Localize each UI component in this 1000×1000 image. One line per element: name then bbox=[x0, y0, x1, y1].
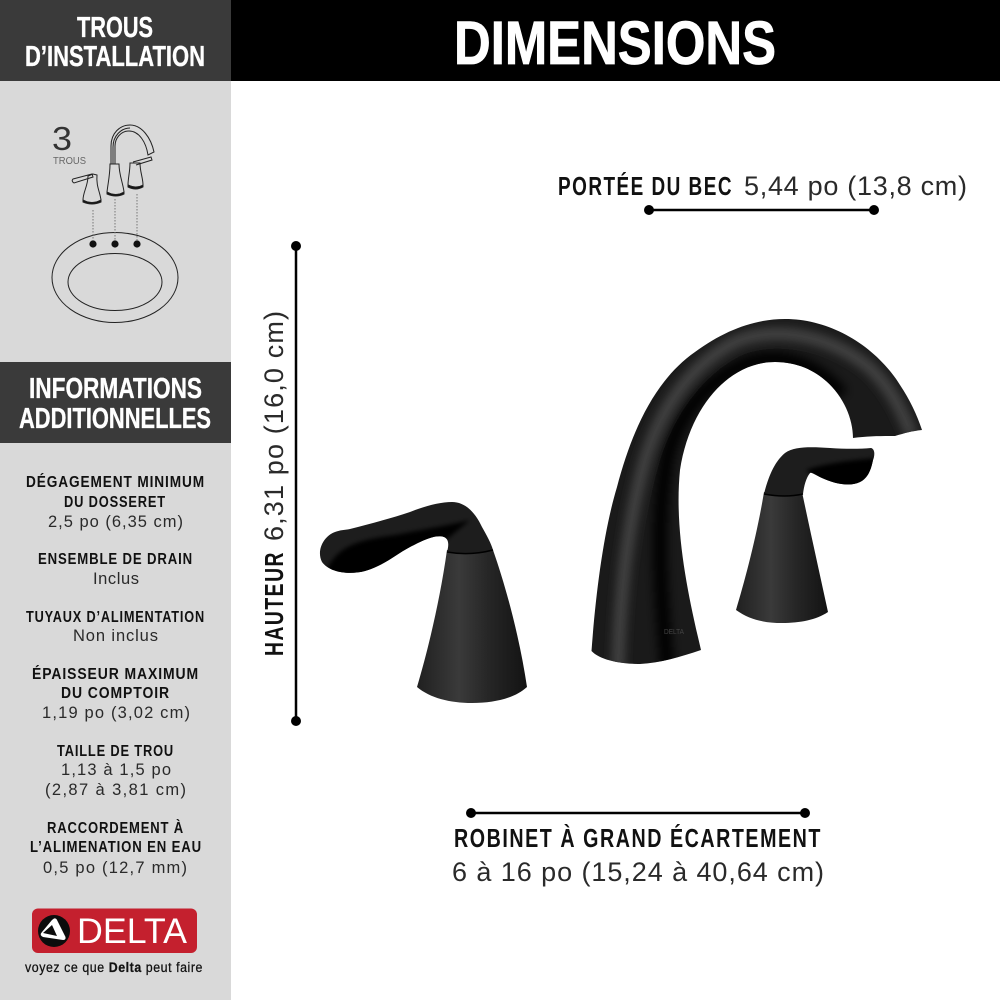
spec: hole size: TAILLE DE TROU bbox=[57, 743, 174, 760]
spec: backsplash clearance: DÉGAGEMENT MINIMUM bbox=[26, 474, 205, 491]
logo mark on spout: DELTA bbox=[664, 627, 684, 636]
lever underside shadow bbox=[807, 457, 874, 484]
logo: Delta: DELTA bbox=[77, 912, 188, 951]
lever underside shadow bbox=[325, 520, 470, 575]
spec: water connection: RACCORDEMENT À bbox=[47, 820, 184, 837]
spec: drain assembly bbox=[38, 551, 193, 588]
sidebar panel bbox=[0, 81, 231, 1000]
dimension: height bbox=[259, 241, 301, 726]
spec: backsplash clearance bbox=[26, 474, 205, 531]
count label bbox=[52, 120, 86, 167]
spec: max counter thickness: DU COMPTOIR bbox=[61, 685, 170, 702]
spec: drain assembly: ENSEMBLE DE DRAIN bbox=[38, 551, 193, 568]
header: additional information: INFORMATIONS bbox=[29, 373, 202, 405]
spec: backsplash clearance: 2,5 po (6,35 cm) bbox=[48, 513, 183, 531]
spec: max counter thickness: 1,19 po (3,02 cm) bbox=[42, 704, 190, 722]
dimension: spout reach bbox=[558, 171, 967, 215]
spec: hole size: (2,87 à 3,81 cm) bbox=[45, 781, 186, 799]
dimension: spout reach: PORTÉE DU BEC bbox=[558, 172, 733, 201]
spec: drain assembly: Inclus bbox=[93, 570, 139, 588]
dimension: widespread faucet: 6 à 16 po (15,24 à 40,64 cm) bbox=[452, 857, 824, 887]
spec: water connection: L’ALIMENATION EN EAU bbox=[30, 839, 202, 856]
spec: max counter thickness bbox=[32, 666, 199, 722]
logo: Delta bbox=[32, 908, 197, 953]
mounting holes bbox=[89, 240, 141, 248]
dimension: spout reach: 5,44 po (13,8 cm) bbox=[744, 171, 967, 201]
spec: supply lines bbox=[26, 609, 205, 645]
faucet: right handle bbox=[736, 440, 880, 623]
title banner: DIMENSIONS bbox=[454, 9, 776, 77]
spec: backsplash clearance: DU DOSSERET bbox=[64, 494, 166, 511]
icon: three-hole faucet and basin bbox=[52, 120, 178, 322]
count label: TROUS bbox=[53, 155, 86, 167]
faucet: spout bbox=[585, 310, 930, 675]
dimension: height: 6,31 po (16,0 cm) bbox=[259, 311, 289, 541]
dimension: height: HAUTEUR bbox=[261, 551, 289, 656]
header: mounting holes: D’INSTALLATION bbox=[25, 41, 205, 73]
spec: max counter thickness: ÉPAISSEUR MAXIMUM bbox=[32, 666, 199, 683]
count label: 3 bbox=[52, 120, 72, 157]
basin bbox=[52, 232, 178, 322]
header: mounting holes bbox=[0, 0, 231, 81]
spout highlights bbox=[618, 334, 912, 675]
dimension: widespread faucet bbox=[452, 808, 824, 887]
faucet line drawing bbox=[72, 125, 154, 204]
dimension: widespread faucet: ROBINET À GRAND ÉCARTEMENT bbox=[454, 824, 822, 853]
title banner bbox=[231, 0, 1000, 81]
spec: hole size bbox=[45, 743, 186, 799]
tagline: voyez ce que Delta peut faire bbox=[25, 960, 203, 975]
dotted guides bbox=[93, 194, 137, 240]
spec: water connection bbox=[30, 820, 202, 877]
header: mounting holes: TROUS bbox=[77, 12, 153, 44]
spec: water connection: 0,5 po (12,7 mm) bbox=[43, 859, 187, 877]
spec: supply lines: Non inclus bbox=[73, 627, 158, 645]
spec: hole size: 1,13 à 1,5 po bbox=[61, 761, 171, 779]
header: additional information bbox=[0, 362, 231, 443]
header: additional information: ADDITIONNELLES bbox=[19, 403, 211, 435]
spec: supply lines: TUYAUX D’ALIMENTATION bbox=[26, 609, 205, 626]
faucet: left handle bbox=[315, 498, 527, 703]
